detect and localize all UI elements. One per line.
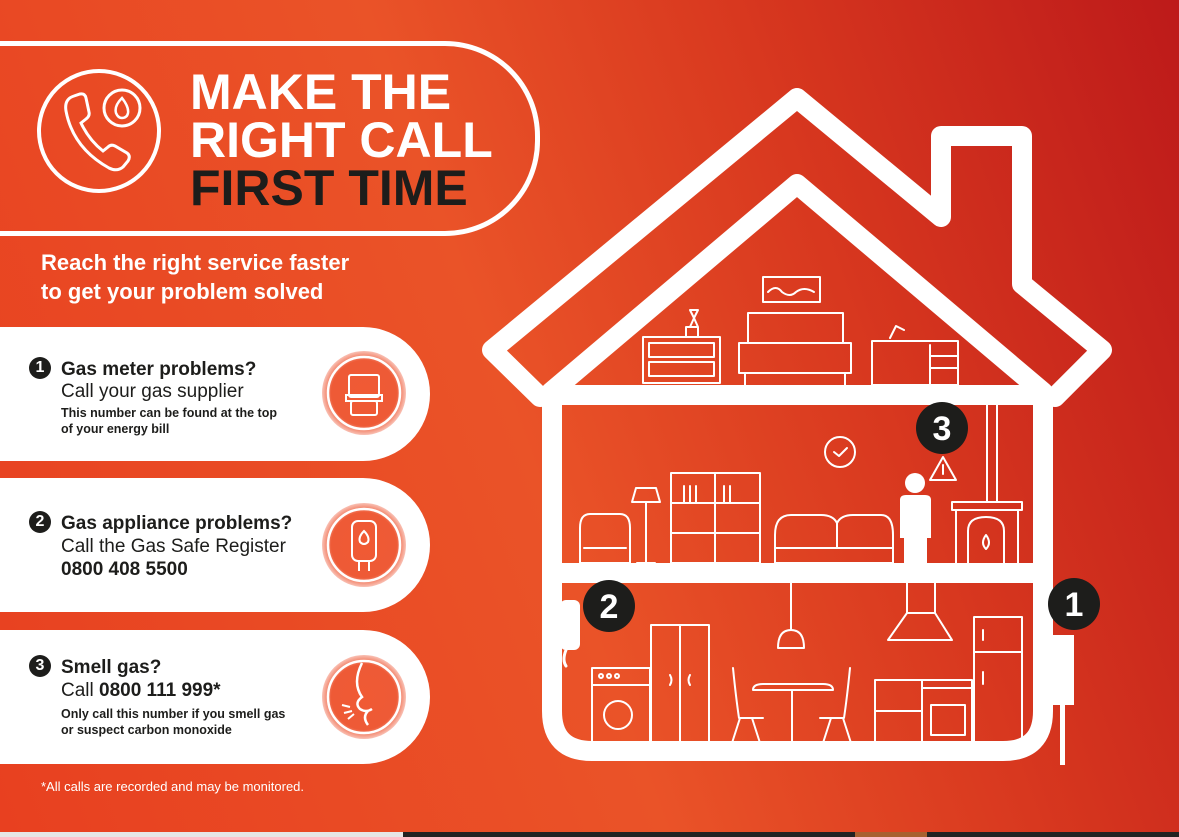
badges: 3: [933, 410, 951, 448]
badges: 2: [600, 588, 618, 626]
icon: gas meter: [322, 351, 406, 435]
panel: gas meter: 1: [36, 359, 44, 376]
furniture: [580, 277, 1022, 743]
panel: smell gas: Call 0800 111 999*: [61, 680, 221, 701]
title pill: [0, 41, 540, 236]
badges: [583, 402, 1100, 632]
panel: gas meter: Call your gas supplier: [61, 381, 244, 402]
panel: smell gas: or suspect carbon monoxide: [61, 723, 232, 737]
panel: gas appliance: 2: [36, 513, 44, 530]
panel: gas appliance: Gas appliance problems?: [61, 513, 292, 534]
subtitle: Reach the right service faster: [41, 250, 349, 275]
walls and floors: [552, 395, 1043, 751]
boiler: [560, 600, 580, 666]
panel: gas meter: This number can be found at the top: [61, 406, 277, 420]
bottom strip: [0, 832, 403, 837]
title text: MAKE THE: [190, 64, 451, 120]
panel: gas meter: of your energy bill: [61, 422, 169, 436]
panel: smell gas: 3: [36, 657, 44, 674]
roof: [492, 98, 1102, 397]
title text: FIRST TIME: [190, 160, 468, 216]
panel: gas appliance: [0, 478, 430, 612]
title text: RIGHT CALL: [190, 112, 493, 168]
icon: nose: [322, 655, 406, 739]
panel: gas appliance: Call the Gas Safe Register: [61, 536, 286, 557]
panel: gas meter: [0, 327, 430, 461]
subtitle: [41, 250, 349, 304]
icon: warning: [930, 457, 956, 480]
badges: 1: [1065, 586, 1083, 624]
icon: boiler: [322, 503, 406, 587]
subtitle: to get your problem solved: [41, 279, 323, 304]
panel: smell gas: Smell gas?: [61, 657, 161, 678]
title text: [190, 64, 493, 216]
icon: phone with flame: [37, 69, 161, 193]
panel: gas meter: Gas meter problems?: [61, 359, 256, 380]
panel: gas appliance: 0800 408 5500: [61, 559, 188, 580]
gas meter and pipe: [1053, 635, 1074, 765]
person: [900, 473, 931, 563]
panel: smell gas: Only call this number if you smell gas: [61, 707, 285, 721]
panel: smell gas: [0, 630, 430, 764]
footnote: *All calls are recorded and may be monitored.: [41, 779, 304, 794]
